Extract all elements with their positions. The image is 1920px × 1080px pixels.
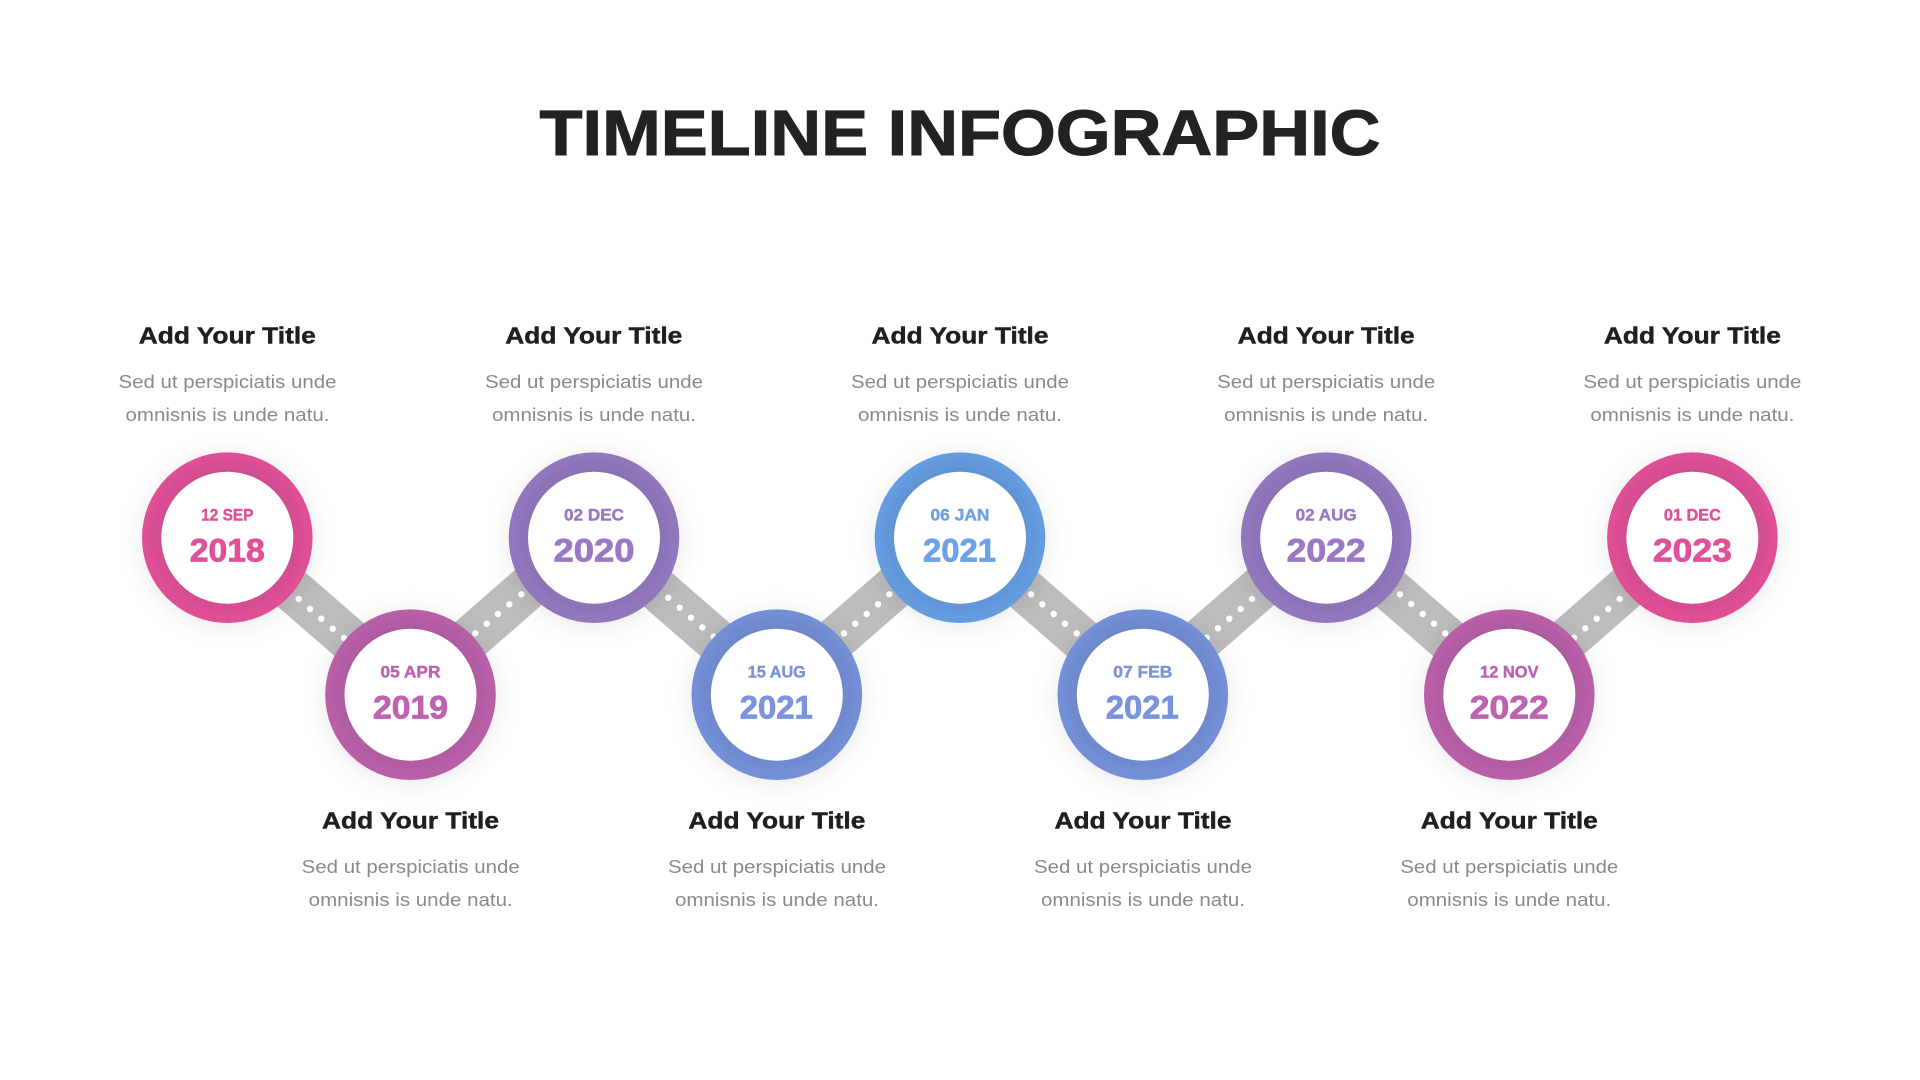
milestone 7: omnisnis is unde natu. <box>1224 404 1428 425</box>
milestone 6: Add Your Title <box>1054 807 1232 833</box>
milestone 9: Add Your Title <box>1604 322 1781 348</box>
milestone 4: omnisnis is unde natu. <box>675 889 879 910</box>
milestone 7: 2022 <box>1287 533 1366 569</box>
milestone 1: 2018 <box>190 533 265 569</box>
milestone 7 <box>1217 322 1435 623</box>
milestone 1: Add Your Title <box>139 322 316 348</box>
milestone 8: 2022 <box>1470 689 1549 725</box>
milestone 5: Add Your Title <box>872 322 1048 348</box>
milestone 2: 05 APR <box>380 664 441 682</box>
milestone 2: Add Your Title <box>322 807 499 833</box>
milestone 8: omnisnis is unde natu. <box>1407 889 1611 910</box>
milestone 6: 2021 <box>1106 689 1179 725</box>
milestone 8: Sed ut perspiciatis unde <box>1400 856 1618 877</box>
milestone 8: Add Your Title <box>1421 807 1598 833</box>
milestone 3 <box>485 322 703 623</box>
milestone 6: Sed ut perspiciatis unde <box>1034 856 1252 877</box>
milestone 5: 2021 <box>923 533 996 569</box>
connector dots <box>296 591 1623 641</box>
milestone 5 <box>851 322 1069 623</box>
milestone 7: Sed ut perspiciatis unde <box>1217 371 1435 392</box>
milestone 9: omnisnis is unde natu. <box>1590 404 1794 425</box>
milestone 3: Add Your Title <box>505 322 682 348</box>
milestone 5: omnisnis is unde natu. <box>858 404 1062 425</box>
milestone 9: 2023 <box>1653 533 1732 569</box>
milestone 2: 2019 <box>373 689 448 725</box>
milestone 9 <box>1583 322 1801 623</box>
milestone 6: omnisnis is unde natu. <box>1041 889 1245 910</box>
connectors <box>254 555 1665 672</box>
milestone 7: Add Your Title <box>1238 322 1415 348</box>
milestone 8 <box>1400 609 1618 910</box>
milestone 1 <box>118 322 336 623</box>
milestone 4: Sed ut perspiciatis unde <box>668 856 886 877</box>
milestone 5: 06 JAN <box>930 507 990 525</box>
milestone 2 <box>302 609 520 910</box>
milestone 9: 01 DEC <box>1664 507 1721 525</box>
milestone 4: 2021 <box>740 689 813 725</box>
milestone 3: 2020 <box>554 533 634 569</box>
milestone 3: 02 DEC <box>564 507 624 525</box>
milestone 1: omnisnis is unde natu. <box>126 404 330 425</box>
milestone 2: Sed ut perspiciatis unde <box>302 856 520 877</box>
milestone 6 <box>1034 609 1252 910</box>
milestone 3: omnisnis is unde natu. <box>492 404 696 425</box>
milestone 8: 12 NOV <box>1480 664 1539 682</box>
milestone 4: 15 AUG <box>748 664 806 682</box>
milestone 3: Sed ut perspiciatis unde <box>485 371 703 392</box>
title: TIMELINE INFOGRAPHIC <box>540 97 1380 169</box>
milestone 5: Sed ut perspiciatis unde <box>851 371 1069 392</box>
milestone 6: 07 FEB <box>1113 664 1172 682</box>
milestone 4: Add Your Title <box>688 807 865 833</box>
milestone 4 <box>668 609 886 910</box>
milestone 1: Sed ut perspiciatis unde <box>118 371 336 392</box>
milestone 7: 02 AUG <box>1296 507 1357 525</box>
milestone 9: Sed ut perspiciatis unde <box>1583 371 1801 392</box>
milestone 1: 12 SEP <box>201 507 253 525</box>
milestone 2: omnisnis is unde natu. <box>309 889 513 910</box>
